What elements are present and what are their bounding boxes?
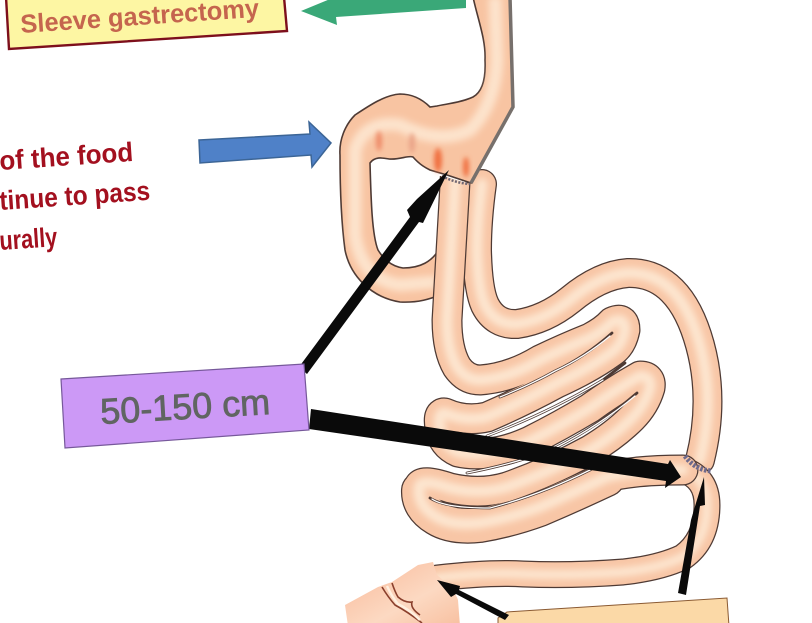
red text: part of the food continues naturally xyxy=(0,137,151,256)
blue arrow pointing to pouch xyxy=(199,122,331,167)
black arrow to common channel start xyxy=(678,477,705,595)
orange label box xyxy=(498,598,729,623)
gastric sleeve and pouch loop xyxy=(340,0,513,302)
staple line at pouch outlet xyxy=(442,176,470,184)
small bowel loops xyxy=(419,165,707,578)
cecum xyxy=(345,562,460,623)
purple label: 50-150 cm xyxy=(61,364,309,448)
red text: part of the food continues naturally: of the food xyxy=(0,137,134,176)
black arrow to cecum xyxy=(437,580,509,620)
black arrow along limb to jejunojejunostomy xyxy=(309,409,681,488)
green arrow pointing to sleeve xyxy=(301,0,466,25)
red text: part of the food continues naturally: tinue to pass xyxy=(0,176,151,216)
purple label: 50-150 cm: 50-150 cm xyxy=(99,381,271,432)
anastomosis staples xyxy=(685,456,712,471)
biliopancreatic limb xyxy=(477,184,708,460)
red text: part of the food continues naturally: urally xyxy=(0,222,58,256)
black arrow to gastrojejunostomy xyxy=(299,170,449,374)
yellow label: sleeve gastrectomy xyxy=(6,0,287,49)
